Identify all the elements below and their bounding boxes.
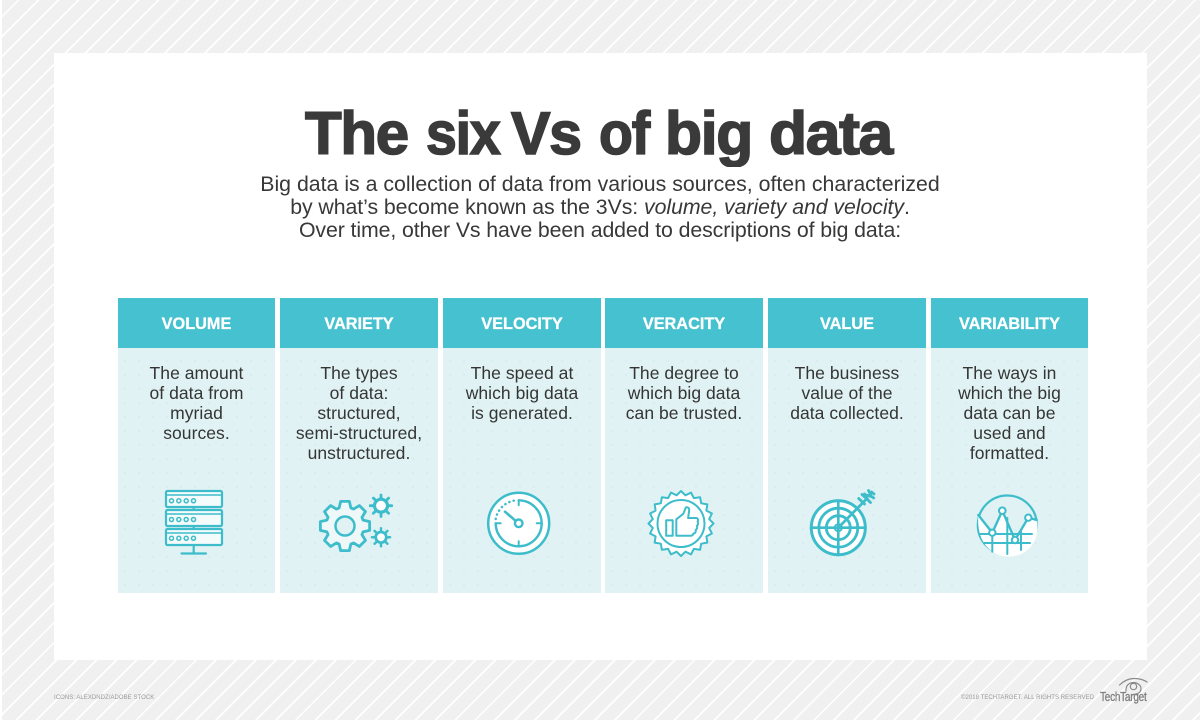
- title: big: [665, 100, 752, 167]
- intro text: Big data is a collection of data from various sources, often characterized: [260, 172, 940, 196]
- title: data: [769, 100, 892, 167]
- column: variety: unstructured.: [308, 443, 410, 463]
- column: volume: The amount: [150, 363, 243, 383]
- column: volume: myriad: [170, 403, 223, 423]
- title: of: [599, 100, 649, 167]
- column: velocity: VELOCITY: [481, 315, 563, 333]
- column: veracity: which big data: [628, 383, 740, 403]
- column: variety: structured,: [317, 403, 401, 423]
- column: value: data collected.: [790, 403, 904, 423]
- title: The: [305, 100, 408, 167]
- intro text: [260, 172, 940, 242]
- column: veracity: The degree to: [629, 363, 739, 383]
- icon: gears: [320, 495, 392, 551]
- icon: TechTarget eye: [1120, 678, 1147, 694]
- TechTarget logo wordmark: TechTarget: [1100, 690, 1147, 704]
- column: veracity: [605, 298, 763, 593]
- column: value: value of the: [801, 383, 893, 403]
- intro text: Over time, other Vs have been added to descriptions of big data:: [299, 218, 901, 242]
- column: velocity: The speed at: [471, 363, 573, 383]
- copyright: ©2018 TECHTARGET. ALL RIGHTS RESERVED: [961, 695, 1094, 701]
- column: value: [768, 298, 926, 593]
- column: value: The business: [795, 363, 899, 383]
- column: volume: sources.: [163, 423, 230, 443]
- column: variety: VARIETY: [324, 315, 394, 333]
- column: volume: [118, 298, 275, 593]
- icon: target with arrow: [811, 490, 874, 555]
- column: volume: VOLUME: [162, 315, 231, 333]
- column: veracity: VERACITY: [643, 315, 725, 333]
- credit: icons: ICONS: ALEXDNDZ/ADOBE STOCK: [54, 695, 154, 701]
- intro text: by what’s become known as the 3Vs: volume, variety and velocity.: [290, 195, 910, 219]
- column: variety: of data:: [330, 383, 388, 403]
- column: velocity: [443, 298, 601, 593]
- icon: server: [166, 491, 222, 554]
- column: variety: [280, 298, 438, 593]
- icon: line chart circle: [978, 496, 1037, 557]
- column: variability: [931, 298, 1088, 593]
- icon: speedometer: [488, 493, 549, 554]
- column: velocity: is generated.: [471, 403, 573, 423]
- title: six: [426, 100, 499, 167]
- icon: thumbs up badge: [648, 491, 714, 556]
- title: [304, 100, 894, 167]
- column: variability: data can be: [963, 403, 1056, 423]
- white panel: [54, 53, 1147, 660]
- column: variability: which the big: [958, 383, 1061, 403]
- column: value: VALUE: [820, 315, 874, 333]
- title: Vs: [511, 100, 581, 167]
- column: volume: of data from: [150, 383, 243, 403]
- column: veracity: can be trusted.: [626, 403, 742, 423]
- column: velocity: which big data: [466, 383, 578, 403]
- column: variability: The ways in: [963, 363, 1056, 383]
- column: variety: semi-structured,: [296, 423, 422, 443]
- column: variability: used and: [973, 423, 1046, 443]
- column: variability: formatted.: [970, 443, 1049, 463]
- column: variability: VARIABILITY: [959, 315, 1060, 333]
- column: variety: The types: [320, 363, 398, 383]
